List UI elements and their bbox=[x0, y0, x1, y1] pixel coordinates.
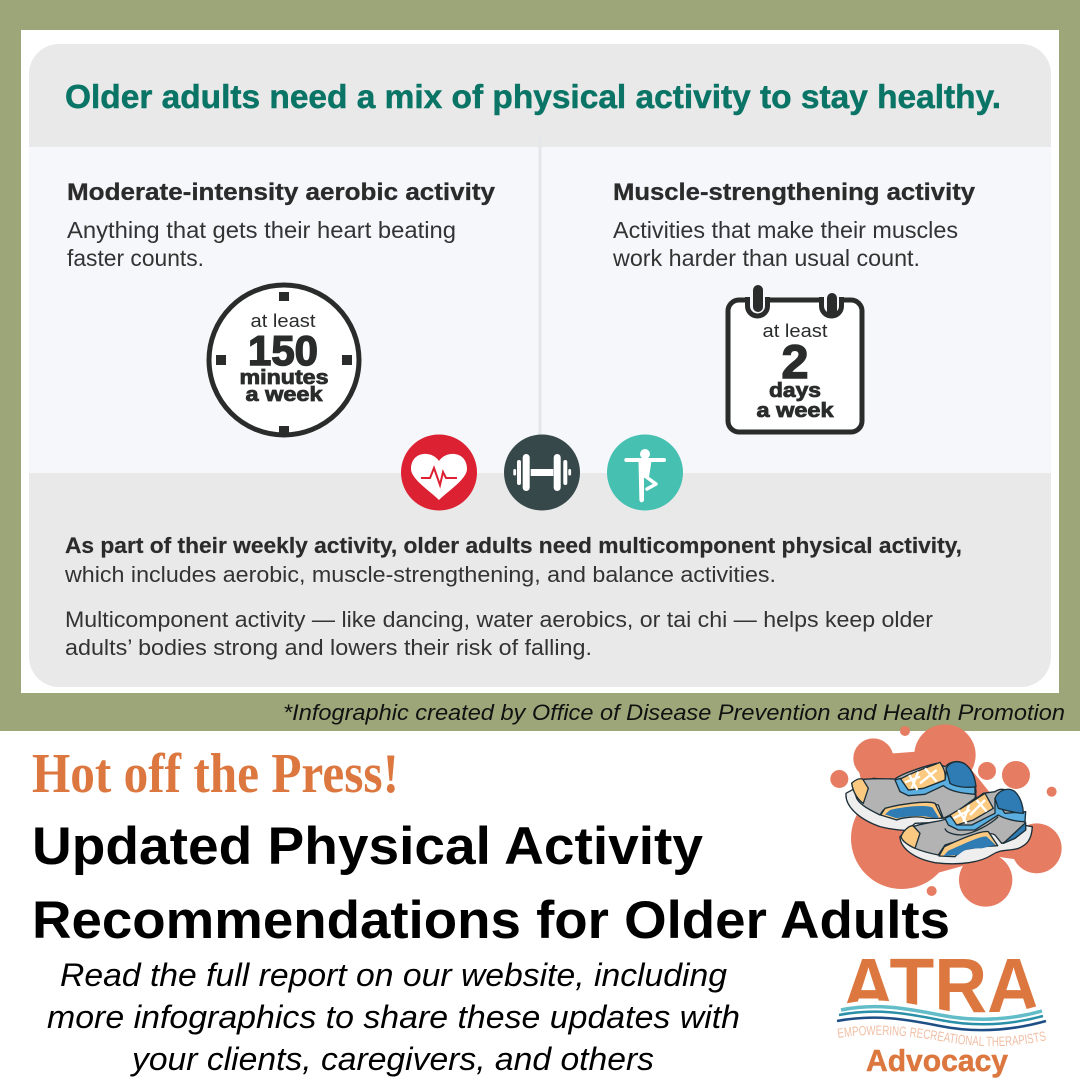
main title: Updated Physical Activity bbox=[32, 817, 704, 876]
panel: middle light section bbox=[29, 147, 1051, 473]
icon: clock 150 minutes a week: at least bbox=[250, 311, 316, 331]
icon: dumbbell bbox=[504, 434, 580, 510]
heading: aerobic: Moderate-intensity aerobic activity bbox=[67, 179, 496, 206]
text block: aerobic description: faster counts. bbox=[67, 245, 204, 271]
text block: muscle description: Activities that make their muscles bbox=[613, 217, 958, 243]
front sneaker bbox=[900, 789, 1032, 864]
panel: muscle-strengthening activity bbox=[612, 179, 976, 432]
icon: calendar 2 days a week: 2 bbox=[782, 335, 808, 388]
text block: multicomponent activity bbox=[64, 533, 962, 660]
panel: infographic bbox=[21, 30, 1059, 693]
logo: ATRA Advocacy bbox=[836, 943, 1046, 1078]
heading: hot off the press: Hot off the Press! bbox=[32, 743, 399, 805]
icon: sneakers on coral splash bbox=[830, 724, 1062, 907]
icon: calendar 2 days a week: days bbox=[769, 380, 821, 402]
icon: calendar 2 days a week: a week bbox=[756, 400, 835, 422]
icon: clock 150 minutes a week bbox=[209, 285, 359, 435]
text block: read the full report: Read the full report on our website, including bbox=[60, 957, 727, 993]
text block: multicomponent activity: Multicomponent activity — like dancing, water aerobics, or tai chi — helps keep older bbox=[65, 607, 934, 632]
icon: calendar 2 days a week: at least bbox=[762, 321, 828, 341]
heading: muscle-strengthening: Muscle-strengthening activity bbox=[613, 179, 976, 206]
source credit: *Infographic created by Office of Disease Prevention and Health Promotion bbox=[283, 700, 1065, 725]
title: Older adults need a mix of physical activity to stay healthy. bbox=[65, 78, 1001, 115]
logo wordmark: ATRA bbox=[842, 943, 1040, 1029]
icon: heart bbox=[401, 434, 477, 510]
main title bbox=[32, 817, 950, 950]
icon: clock 150 minutes a week: 150 bbox=[248, 327, 318, 374]
text block: multicomponent activity: adults’ bodies strong and lowers their risk of falling. bbox=[65, 635, 592, 660]
text block: read the full report: your clients, caregivers, and others bbox=[130, 1041, 654, 1077]
main title: Recommendations for Older Adults bbox=[32, 891, 950, 950]
icon: clock 150 minutes a week: minutes bbox=[240, 367, 328, 389]
back sneaker bbox=[846, 762, 977, 830]
icon: calendar 2 days a week bbox=[728, 285, 862, 432]
coral splash bbox=[830, 724, 1062, 907]
text block: multicomponent activity: As part of their weekly activity, older adults need multicomponent physical activity, bbox=[65, 533, 962, 558]
panel: card background bbox=[29, 44, 1051, 687]
text block: read the full report bbox=[47, 957, 740, 1077]
text block: aerobic description: Anything that gets their heart beating bbox=[67, 217, 456, 243]
icon: balance figure bbox=[607, 434, 683, 510]
panel: aerobic activity bbox=[67, 179, 496, 435]
text block: muscle description: work harder than usual count. bbox=[612, 245, 920, 271]
text block: aerobic description bbox=[67, 217, 456, 271]
panel: green frame bbox=[0, 0, 1080, 731]
icon: clock 150 minutes a week: a week bbox=[246, 384, 324, 406]
logo tagline on curve: EMPOWERING RECREATIONAL THERAPISTS bbox=[838, 1026, 1046, 1046]
logo subtitle: Advocacy bbox=[866, 1043, 1009, 1078]
text block: read the full report: more infographics to share these updates with bbox=[47, 999, 740, 1035]
text block: muscle description bbox=[612, 217, 958, 271]
logo waves bbox=[837, 1007, 1046, 1030]
panel: white mat bbox=[21, 30, 1059, 693]
text block: multicomponent activity: which includes aerobic, muscle-strengthening, and balance activities. bbox=[64, 562, 776, 587]
